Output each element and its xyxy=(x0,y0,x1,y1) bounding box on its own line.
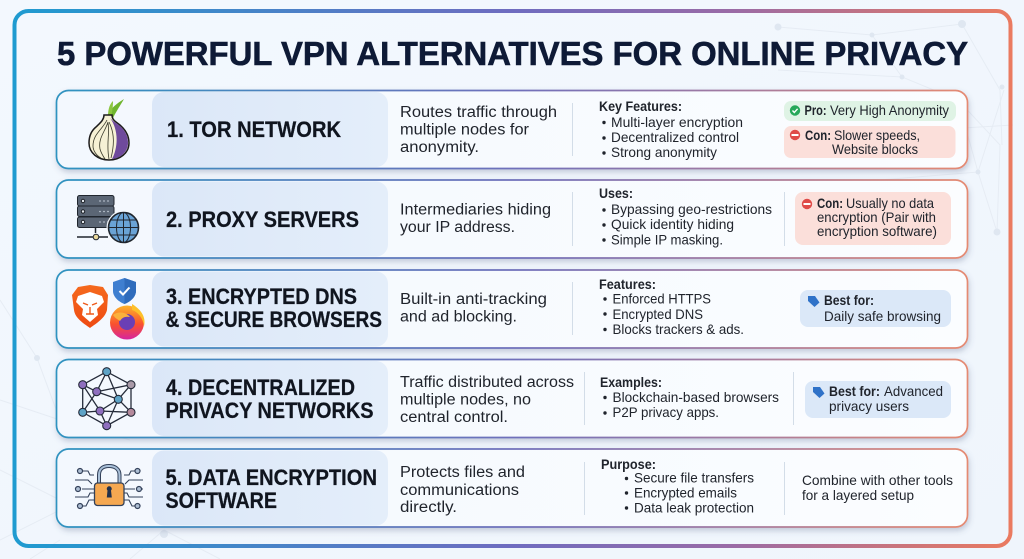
icon: padlock with circuits xyxy=(75,466,143,508)
description: multiple nodes, no xyxy=(400,392,531,408)
description: multiple nodes for xyxy=(400,122,529,138)
best for badge: Best for: xyxy=(829,384,880,399)
description xyxy=(400,202,551,236)
uses list: Uses: xyxy=(599,186,633,201)
section heading box xyxy=(152,182,388,256)
features list: Encrypted DNS xyxy=(612,307,703,322)
con badge: Slower speeds, xyxy=(834,128,920,143)
best for badge: Best for: xyxy=(824,293,874,308)
heading xyxy=(166,284,382,332)
heading: PRIVACY NETWORKS xyxy=(166,398,374,423)
icon: server and globe xyxy=(77,196,140,244)
tip text: Combine with other tools xyxy=(802,473,953,488)
key features list: Multi-layer encryption xyxy=(611,115,743,130)
con badge: Con: xyxy=(817,196,843,211)
con badge xyxy=(784,126,956,158)
panel: Tor network xyxy=(56,90,968,168)
description xyxy=(400,374,574,426)
features list: Features: xyxy=(599,277,656,292)
description: Protects files and xyxy=(400,464,525,481)
purpose list xyxy=(601,457,754,516)
con badge: Con: xyxy=(805,128,831,143)
icon: onion xyxy=(89,99,129,160)
heading: 5. DATA ENCRYPTION xyxy=(166,465,377,490)
key features list: Decentralized control xyxy=(611,130,739,145)
heading: 1. TOR NETWORK xyxy=(167,117,341,142)
con badge: encryption (Pair with xyxy=(817,210,936,225)
best for badge: Advanced xyxy=(884,384,943,399)
best for badge xyxy=(805,381,951,418)
tip text: for a layered setup xyxy=(802,488,914,503)
uses list xyxy=(599,186,772,248)
description: Traffic distributed across xyxy=(400,374,574,391)
section heading box xyxy=(152,272,388,346)
best for badge xyxy=(800,290,951,327)
uses list: Bypassing geo-restrictions xyxy=(611,202,772,217)
panel: encrypted DNS and secure browsers xyxy=(56,270,968,348)
purpose list: Encrypted emails xyxy=(634,486,737,500)
examples list: Examples: xyxy=(600,375,662,390)
pro badge xyxy=(784,101,956,121)
panel: data encryption software xyxy=(56,449,968,527)
section heading box xyxy=(152,361,388,436)
tip text xyxy=(802,473,953,503)
purpose list: Data leak protection xyxy=(634,500,754,516)
description xyxy=(400,104,557,156)
description: communications xyxy=(400,482,519,499)
heading: & SECURE BROWSERS xyxy=(166,307,382,332)
uses list: Simple IP masking. xyxy=(611,232,723,248)
description: and ad blocking. xyxy=(400,308,517,326)
con badge xyxy=(795,192,951,245)
description: Built-in anti-tracking xyxy=(400,291,547,308)
best for badge: Daily safe browsing xyxy=(824,309,941,324)
heading: SOFTWARE xyxy=(166,488,277,513)
title: 5 POWERFUL VPN ALTERNATIVES FOR ONLINE PRIVACY xyxy=(57,36,968,73)
heading: 4. DECENTRALIZED xyxy=(166,375,355,400)
heading: 3. ENCRYPTED DNS xyxy=(166,284,357,309)
description xyxy=(400,464,525,516)
panel: proxy servers xyxy=(56,180,968,258)
examples list: P2P privacy apps. xyxy=(612,405,719,420)
description: Routes traffic through xyxy=(400,104,557,121)
description: anonymity. xyxy=(400,139,479,156)
icon: browsers and shield xyxy=(72,278,144,340)
description: central control. xyxy=(400,409,508,426)
pro badge: Very High Anonymity xyxy=(830,103,949,118)
key features list: Key Features: xyxy=(599,99,682,114)
heading xyxy=(166,465,377,513)
description xyxy=(400,291,547,326)
section heading box xyxy=(152,450,388,526)
con badge: Website blocks xyxy=(832,142,918,157)
examples list xyxy=(600,375,779,420)
description: your IP address. xyxy=(400,219,515,236)
examples list: Blockchain-based browsers xyxy=(612,390,779,405)
key features list xyxy=(599,99,743,160)
description: directly. xyxy=(400,499,457,516)
best for badge: privacy users xyxy=(829,399,909,414)
purpose list: Secure file transfers xyxy=(634,470,754,486)
panel: decentralized privacy networks xyxy=(56,360,968,438)
section heading box xyxy=(152,92,388,167)
features list xyxy=(599,277,744,337)
features list: Blocks trackers & ads. xyxy=(612,322,744,337)
con badge: Usually no data xyxy=(846,196,934,211)
con badge: encryption software) xyxy=(817,224,937,239)
uses list: Quick identity hiding xyxy=(611,217,734,232)
features list: Enforced HTTPS xyxy=(612,292,711,306)
purpose list: Purpose: xyxy=(601,457,656,472)
heading: 2. PROXY SERVERS xyxy=(166,207,359,232)
description: Intermediaries hiding xyxy=(400,202,551,218)
heading xyxy=(166,375,374,423)
pro badge: Pro: xyxy=(804,103,826,118)
icon: mesh network xyxy=(79,368,135,430)
key features list: Strong anonymity xyxy=(611,145,717,160)
